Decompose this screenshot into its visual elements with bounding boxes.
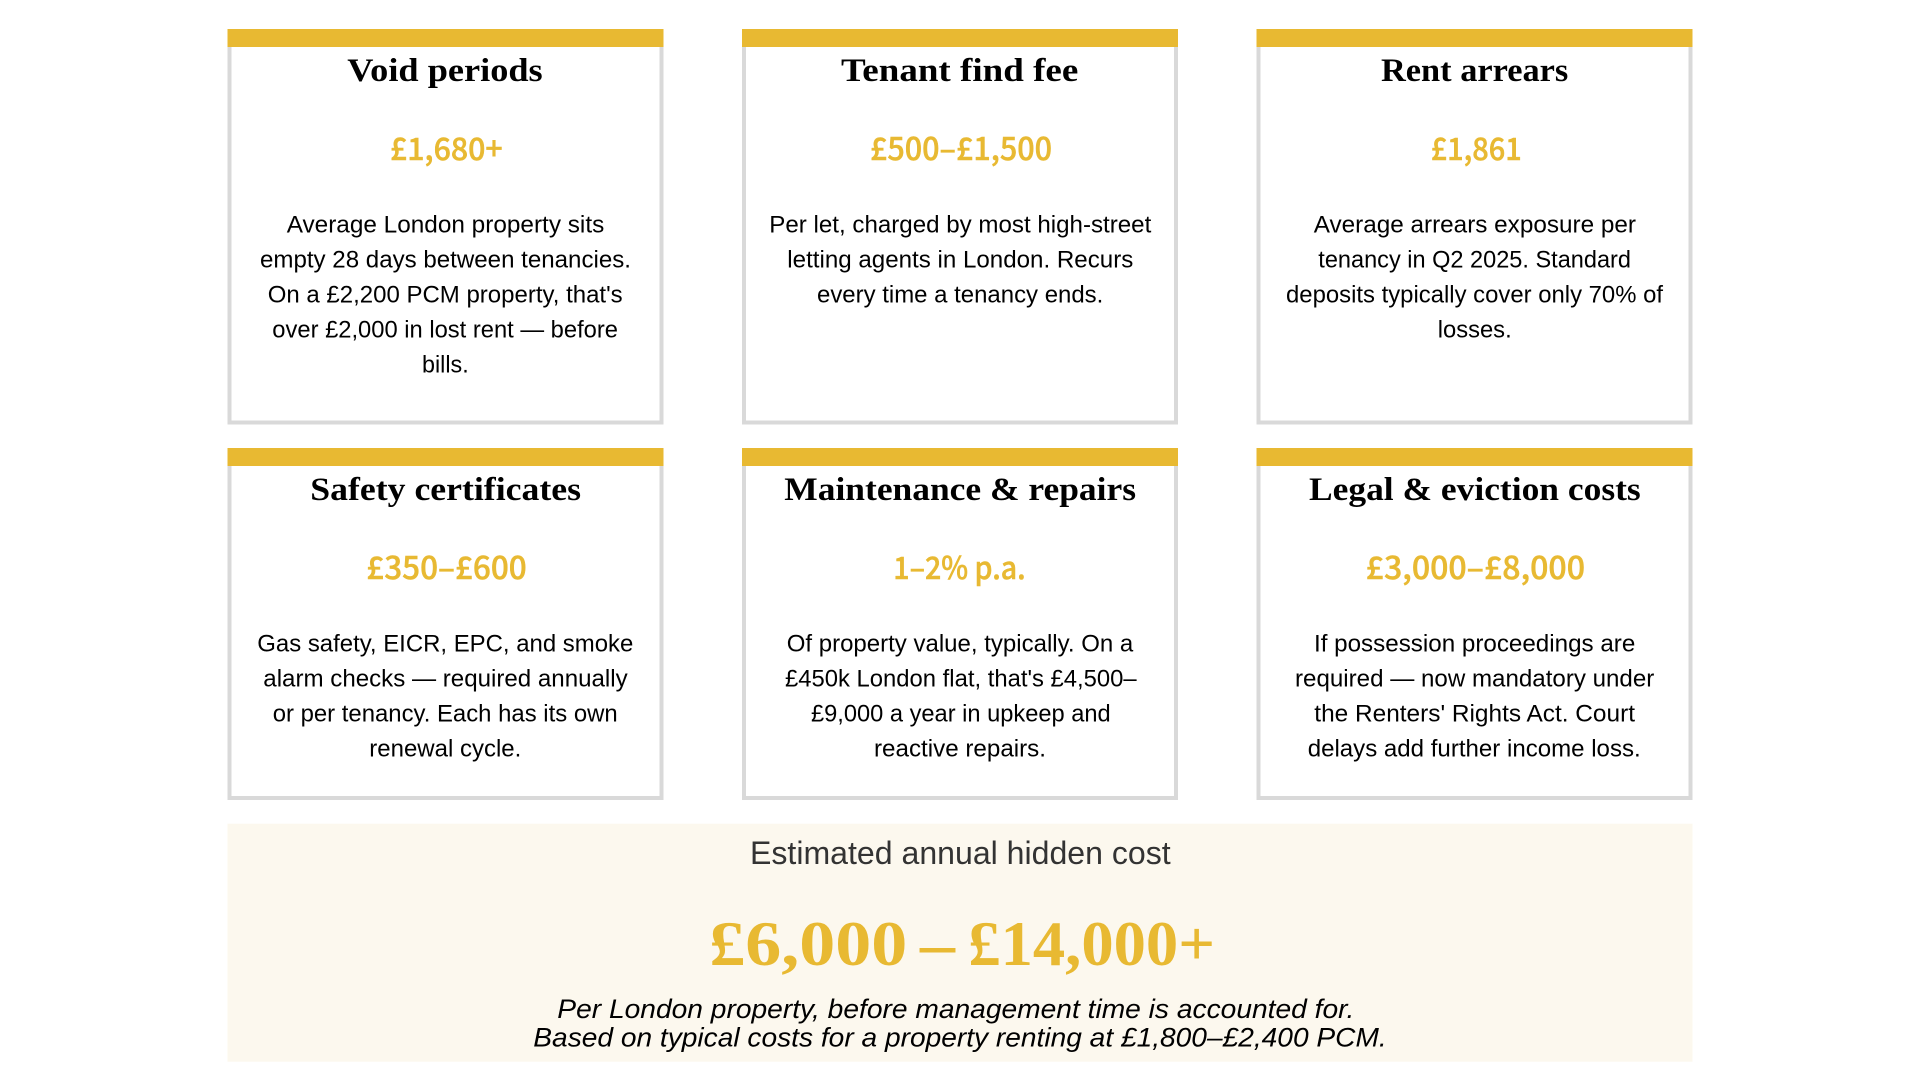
panel: tenant find fee [742, 29, 1178, 422]
text block: summary note [533, 994, 1387, 1053]
total amount range: £6,000 [709, 908, 907, 979]
total amount range [709, 908, 1215, 979]
heading: void periods: Void periods [347, 53, 543, 89]
heading: maintenance and repairs: Maintenance & repairs [784, 472, 1136, 508]
total amount range: £14,000+ [968, 908, 1215, 979]
text block: legal and eviction costs description: delays add further income loss. [1308, 736, 1641, 763]
text block: rent arrears description [1286, 212, 1663, 344]
amount: rent arrears: £1,861 [1431, 124, 1522, 169]
amount: legal and eviction costs: £3,000–£8,000 [1366, 543, 1585, 588]
text block: rent arrears description: tenancy in Q2 2025. Standard [1318, 247, 1631, 274]
panel: rent arrears [1256, 29, 1692, 422]
panel: void periods [228, 29, 664, 422]
text block: safety certificates description: alarm checks — required annually [263, 666, 628, 693]
amount: safety certificates: £350–£600 [366, 543, 527, 588]
panel: legal and eviction costs [1256, 448, 1692, 798]
text block: safety certificates description [257, 631, 633, 763]
text block: legal and eviction costs description: the Renters' Rights Act. Court [1314, 701, 1635, 728]
heading: legal and eviction costs: Legal & eviction costs [1309, 472, 1641, 508]
amount: maintenance and repairs: 1–2% p.a. [893, 543, 1026, 588]
text block: maintenance and repairs description: Of property value, typically. On a [787, 631, 1134, 658]
total amount range: – [919, 908, 956, 979]
panel: safety certificates [228, 448, 664, 798]
heading: safety certificates: Safety certificates [310, 472, 581, 508]
text block: tenant find fee description: letting agents in London. Recurs [787, 247, 1133, 274]
text block: summary note: Per London property, before management time is accounted for. [557, 994, 1354, 1024]
panel: estimated annual hidden cost summary [228, 824, 1692, 1062]
amount: tenant find fee: £500–£1,500 [870, 124, 1052, 169]
text block: tenant find fee description: every time a tenancy ends. [817, 282, 1103, 309]
text block: rent arrears description: Average arrears exposure per [1314, 212, 1636, 239]
panel: maintenance and repairs [742, 448, 1178, 798]
text block: safety certificates description: renewal cycle. [369, 736, 521, 763]
text block: legal and eviction costs description: If possession proceedings are [1314, 631, 1635, 658]
text block: maintenance and repairs description: £9,000 a year in upkeep and [811, 701, 1111, 728]
text block: legal and eviction costs description [1295, 631, 1654, 763]
text block: rent arrears description: losses. [1438, 317, 1512, 344]
text block: void periods description [260, 212, 631, 379]
text block: rent arrears description: deposits typically cover only 70% of [1286, 282, 1663, 309]
text block: summary note: Based on typical costs for a property renting at £1,800–£2,400 PCM. [533, 1023, 1387, 1053]
text block: maintenance and repairs description: reactive repairs. [874, 736, 1046, 763]
text block: void periods description: empty 28 days between tenancies. [260, 247, 631, 274]
text block: void periods description: Average London property sits [287, 212, 604, 239]
text block: legal and eviction costs description: required — now mandatory under [1295, 666, 1654, 693]
heading: estimated annual hidden cost: Estimated annual hidden cost [750, 835, 1171, 871]
text block: void periods description: bills. [422, 352, 469, 379]
text block: maintenance and repairs description: £450k London flat, that's £4,500– [785, 666, 1137, 693]
heading: rent arrears: Rent arrears [1381, 53, 1568, 89]
text block: tenant find fee description: Per let, charged by most high-street [769, 212, 1151, 239]
text block: safety certificates description: Gas safety, EICR, EPC, and smoke [257, 631, 633, 658]
heading: tenant find fee: Tenant find fee [841, 53, 1078, 89]
text block: void periods description: On a £2,200 PCM property, that's [268, 282, 623, 309]
text block: void periods description: over £2,000 in lost rent — before [272, 317, 618, 344]
text block: safety certificates description: or per tenancy. Each has its own [273, 701, 618, 728]
text block: maintenance and repairs description [785, 631, 1137, 763]
text block: tenant find fee description [769, 212, 1151, 309]
amount: void periods: £1,680+ [390, 124, 503, 169]
